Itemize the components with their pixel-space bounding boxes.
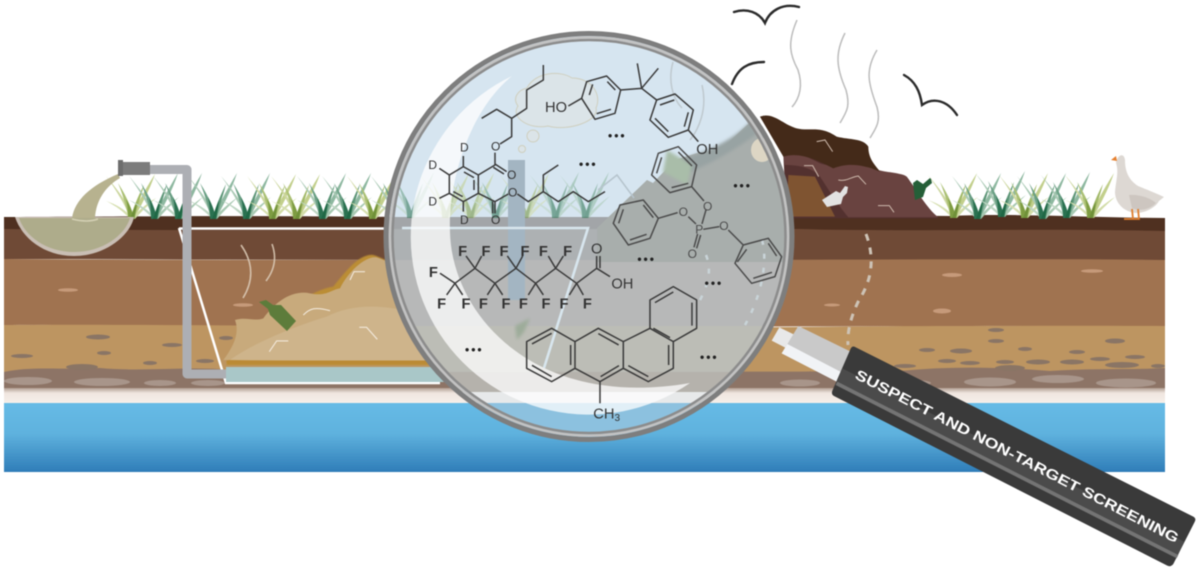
structure: triphenyl phosphate: O (719, 219, 729, 233)
structure: deuterated phthalate ester: O (491, 140, 500, 154)
structure: bisphenol A: HO (545, 100, 567, 116)
structure: perfluorooctanoic acid: F (521, 244, 530, 260)
lens steam (671, 62, 704, 140)
white bottle (822, 186, 848, 207)
structure: perfluorooctanoic acid: F (462, 297, 471, 313)
ellipsis marks: ••• (637, 252, 656, 266)
structure: deuterated phthalate ester: D (460, 140, 469, 154)
connector (772, 326, 851, 382)
structure: perfluorooctanoic acid: F (583, 297, 592, 313)
lens crescent highlight (411, 76, 690, 415)
structure: perfluorooctanoic acid: F (542, 297, 551, 313)
structure: deuterated phthalate ester: D (460, 213, 469, 227)
handle label: SUSPECT AND NON-TARGET SCREENING (852, 367, 1181, 547)
heap brown core (787, 175, 835, 217)
pebbles and rocks (4, 269, 1165, 388)
structure: methylbenz[a]anthracene: CH (593, 406, 614, 422)
structure: deuterated phthalate ester: O (507, 168, 516, 182)
heap maroon layer (783, 154, 938, 217)
structure: perfluorooctanoic acid: F (563, 244, 572, 260)
grip (832, 347, 1195, 566)
ellipsis marks: ••• (579, 157, 598, 171)
lens mound shadow band (686, 122, 755, 170)
magnifying glass handle (772, 326, 1195, 566)
structure: perfluorooctanoic acid: O (591, 241, 602, 257)
structure: bisphenol A (545, 63, 718, 158)
structure: deuterated phthalate ester (428, 65, 605, 227)
ellipsis marks: ••• (733, 179, 752, 193)
buried waste mound (223, 255, 433, 365)
structure: triphenyl phosphate (613, 147, 782, 283)
groundwater (4, 402, 1165, 472)
structure: perfluorooctanoic acid: F (482, 244, 491, 260)
structure: deuterated phthalate ester: D (428, 158, 437, 172)
lens pipe (508, 160, 525, 300)
structure: deuterated phthalate ester: D (428, 195, 437, 209)
structure: triphenyl phosphate: O (703, 199, 712, 213)
ellipsis marks (465, 129, 752, 365)
lens green bottle (663, 150, 692, 185)
ellipsis marks: ••• (700, 351, 719, 365)
green bottle (913, 178, 932, 200)
birds (732, 6, 957, 115)
grass: left row (106, 173, 421, 219)
structure: bisphenol A: OH (696, 142, 718, 158)
grass: right row (928, 171, 1115, 219)
ellipsis marks: ••• (465, 343, 484, 357)
structure: perfluorooctanoic acid: F (519, 297, 528, 313)
ellipsis marks: ••• (705, 276, 723, 290)
heap base (760, 117, 938, 218)
structure: perfluorooctanoic acid: F (429, 265, 438, 281)
lens pipe elbow line (598, 175, 634, 198)
soil layers (4, 215, 1165, 388)
structure: triphenyl phosphate: O (688, 247, 697, 261)
lens grass (385, 172, 610, 218)
structure: deuterated phthalate ester: O (508, 186, 517, 200)
structure: perfluorooctanoic acid: F (560, 297, 569, 313)
structure: perfluorooctanoic acid: F (458, 244, 467, 260)
structure: perfluorooctanoic acid: F (437, 297, 446, 313)
lens rim (386, 34, 792, 440)
structure: perfluorooctanoic acid: F (539, 244, 548, 260)
steam (791, 20, 878, 138)
landfill liner outline (179, 228, 440, 383)
structure: deuterated phthalate ester: O (491, 213, 500, 227)
goose (1111, 155, 1164, 219)
structure: perfluorooctanoic acid: F (502, 297, 511, 313)
leachate collection pipe (118, 160, 226, 374)
lens mound clump (751, 138, 773, 162)
vapour above buried waste (241, 244, 274, 298)
lens small plant (515, 318, 530, 340)
structure: perfluorooctanoic acid: OH (611, 277, 633, 293)
lens sky (390, 36, 748, 218)
structure: perfluorooctanoic acid (429, 241, 633, 313)
landfill leachate pool (226, 367, 446, 382)
buried green bottle (259, 300, 296, 331)
subsurface leachate trail (848, 234, 871, 345)
structure: triphenyl phosphate: P (695, 223, 703, 237)
lens leachate dashes (700, 240, 764, 325)
lens liner (402, 228, 588, 368)
ellipsis marks: ••• (608, 129, 627, 143)
magnifying lens view (388, 36, 790, 437)
structure: perfluorooctanoic acid: F (479, 297, 488, 313)
shoreline (4, 385, 1165, 403)
structure: methylbenz[a]anthracene (527, 287, 697, 424)
seepage pit with leachate (15, 174, 134, 256)
heap dark top layer (760, 116, 880, 172)
structure: triphenyl phosphate: O (679, 205, 688, 219)
structure: perfluorooctanoic acid: F (500, 244, 509, 260)
lens waste mound (598, 124, 789, 262)
surface waste heap (760, 116, 938, 218)
lens soil layers (388, 216, 788, 438)
structure: methylbenz[a]anthracene: 3 (614, 413, 620, 424)
chemical structures (428, 63, 782, 424)
lens cloud (516, 73, 598, 152)
